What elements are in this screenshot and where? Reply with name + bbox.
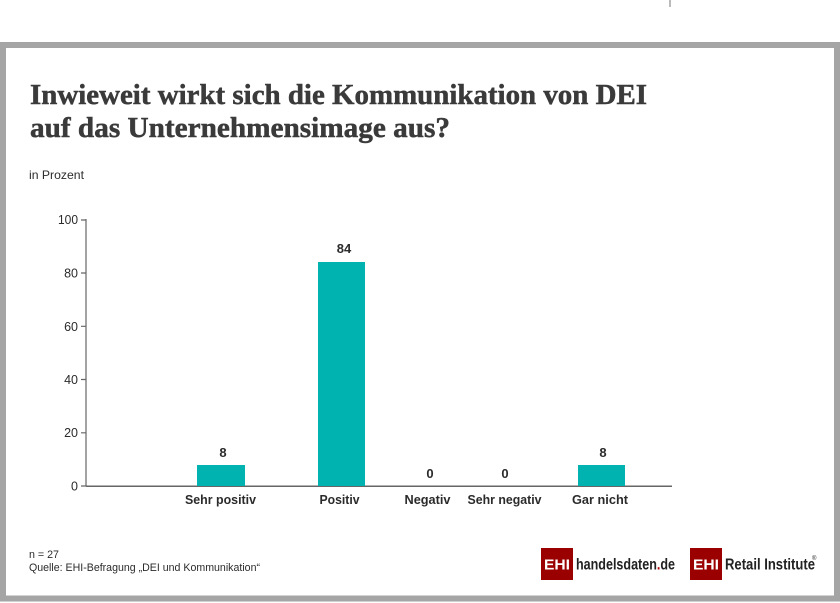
logo: EHI handelsdaten.de: EHI — [544, 556, 570, 574]
bar: Sehr negativ: Sehr negativ — [468, 492, 542, 507]
bar: Positiv: Positiv — [320, 492, 360, 507]
bar: Positiv — [318, 241, 365, 507]
logo: EHI Retail Institute — [690, 548, 817, 580]
y axis: 40 — [64, 373, 78, 387]
bar: Positiv: 84 — [337, 241, 352, 256]
title — [30, 79, 647, 144]
logo: EHI Retail Institute: Retail Institute — [725, 556, 815, 574]
source note: n = 27 — [29, 549, 59, 561]
bar chart — [58, 213, 672, 507]
title: Inwieweit wirkt sich die Kommunikation von DEI — [30, 79, 647, 111]
y axis — [58, 213, 86, 494]
logo: EHI Retail Institute: ® — [812, 555, 817, 562]
bar: Sehr negativ: 0 — [501, 466, 509, 481]
bar: Negativ: Negativ — [404, 492, 451, 507]
y axis: 0 — [71, 480, 78, 494]
bar: Sehr positiv: 8 — [219, 445, 227, 460]
bar: Gar nicht: Gar nicht — [572, 492, 629, 507]
bar: Sehr positiv: Sehr positiv — [185, 492, 257, 507]
y axis: 100 — [58, 213, 78, 227]
logo: EHI handelsdaten.de: handelsdaten.de — [576, 556, 675, 574]
bar: Negativ: 0 — [426, 466, 434, 481]
unit label: in Prozent — [29, 168, 85, 182]
x axis — [86, 486, 672, 487]
logo: EHI Retail Institute: EHI — [693, 556, 719, 574]
y axis: 60 — [64, 320, 78, 334]
source note — [29, 549, 260, 574]
logo: EHI handelsdaten.de — [541, 548, 675, 580]
y axis: 80 — [64, 266, 78, 280]
bar: Sehr negativ — [468, 466, 542, 507]
bar: Sehr positiv — [185, 445, 257, 507]
y axis: 20 — [64, 426, 78, 440]
title: auf das Unternehmensimage aus? — [30, 112, 450, 144]
bar: Gar nicht — [572, 445, 629, 507]
source note: Quelle: EHI-Befragung „DEI und Kommunikation“ — [29, 562, 260, 574]
bar: Gar nicht: 8 — [599, 445, 607, 460]
bar: Negativ — [404, 466, 451, 507]
